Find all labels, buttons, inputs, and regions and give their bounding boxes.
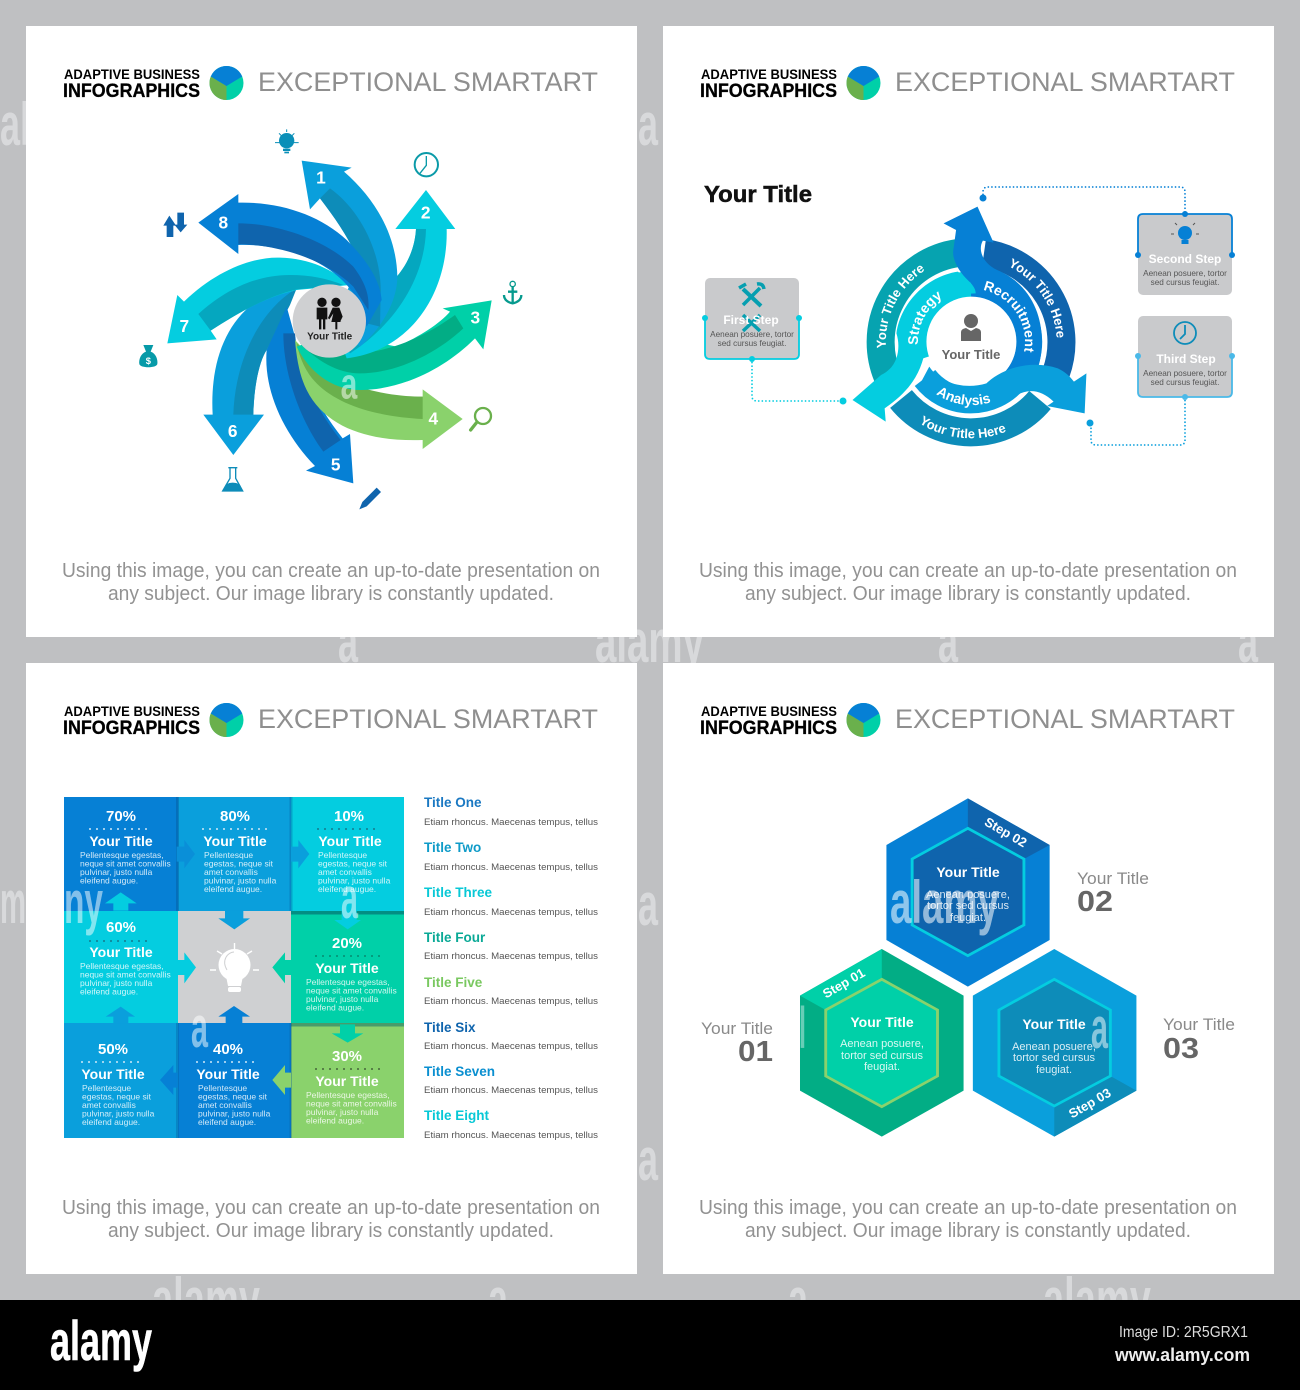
arrow numbers: 4 (429, 409, 439, 429)
arrow: strategy (852, 272, 976, 422)
box: second step: sed cursus feugiat. (1151, 278, 1219, 287)
watermarks on gutters: alamy (1043, 1266, 1151, 1333)
footer text: spiral panel (62, 560, 600, 605)
cell: 80%: pulvinar, justo nulla (204, 876, 277, 886)
footer text: spiral panel: Using this image, you can create an up-to-date presentation on (62, 560, 600, 582)
title list: Etiam rhoncus. Maecenas tempus, tellus (424, 817, 598, 828)
footer text: hexagon panel (699, 1197, 1237, 1242)
curved ring labels: Your Title Here (1011, 258, 1064, 338)
title list: Etiam rhoncus. Maecenas tempus, tellus (424, 1041, 598, 1052)
header: matrix panel: ADAPTIVE BUSINESS (64, 704, 200, 719)
side label: 03: Your Title (1163, 1016, 1235, 1034)
watermarks on gutters: a (638, 91, 658, 158)
cell: 40%: amet convallis (198, 1100, 252, 1110)
watermarks on gutters: a (788, 1266, 808, 1333)
cell: 50% (81, 1041, 155, 1127)
hexagon text: step 01: Aenean posuere, (840, 1038, 924, 1050)
watermark letters (64, 866, 358, 1060)
hexagon text: step 02 (926, 814, 1030, 924)
header: cycle panel: INFOGRAPHICS (700, 81, 837, 102)
cell: 10% (318, 808, 391, 894)
watermarks on gutters: a (638, 1126, 658, 1193)
cell: 60%: eleifend augue. (80, 986, 138, 996)
arrow 3 (297, 300, 492, 390)
side label: 02: 02 (1077, 886, 1113, 918)
hexagon text: step 02: tortor sed cursus (927, 900, 1009, 912)
cell: 20%: eleifend augue. (306, 1002, 364, 1012)
cell: 20%: pulvinar, justo nulla (306, 994, 379, 1004)
footer text: spiral panel: any subject. Our image library is constantly updated. (108, 583, 554, 605)
footer text: cycle panel: any subject. Our image library is constantly updated. (745, 583, 1191, 605)
cell: 60%: neque sit amet convallis (80, 970, 171, 980)
side label: 03: 03 (1163, 1033, 1199, 1065)
icon: clock (1174, 322, 1196, 344)
panel: cycle diagram (663, 26, 1274, 637)
cell: 30%: neque sit amet convallis (306, 1098, 397, 1108)
hexagon shapes (800, 798, 1136, 1137)
box: second step: Aenean posuere, tortor (1143, 269, 1227, 278)
curved ring labels: Strategy (908, 291, 941, 344)
watermarks on gutters: a (938, 608, 958, 675)
watermarks on gutters: al (0, 91, 30, 158)
cell: 60%: pulvinar, justo nulla (80, 978, 153, 988)
spiral arrow chart (139, 129, 521, 509)
cell: 70%: pulvinar, justo nulla (80, 867, 153, 877)
hexagon text: step 03: Your Title (1022, 1016, 1086, 1032)
hexagon text: step 02: feugiat. (950, 912, 986, 924)
cell: 20% (306, 935, 397, 1012)
watermarks over hexagons: a (1091, 996, 1108, 1061)
box: second step (1135, 211, 1235, 295)
hexagon text: step 01: feugiat. (864, 1061, 900, 1073)
footer text: cycle panel (699, 560, 1237, 605)
footer text: matrix panel: any subject. Our image library is constantly updated. (108, 1220, 554, 1242)
cell: 50%: eleifend augue. (82, 1117, 140, 1127)
title list: Etiam rhoncus. Maecenas tempus, tellus (424, 996, 598, 1007)
cell: 10%: amet convallis (318, 867, 372, 877)
panel: matrix (26, 663, 637, 1274)
box: first step: First Step (723, 313, 779, 327)
center white circle (926, 297, 1016, 387)
dotted connectors (752, 187, 1185, 445)
watermark letter: a (341, 360, 358, 408)
cell: 10%: Your Title (318, 833, 382, 849)
watermark letters: a (341, 866, 358, 931)
panel: hexagons (663, 663, 1274, 1274)
curved ring labels (876, 258, 1064, 438)
title list: Etiam rhoncus. Maecenas tempus, tellus (424, 862, 598, 873)
cell: 50%: Pellentesque (82, 1083, 131, 1093)
watermarks on gutters: a (488, 1266, 508, 1333)
center circle with people (293, 284, 366, 358)
header: matrix panel: EXCEPTIONAL SMARTART (258, 704, 598, 734)
side label: 03 (1163, 1016, 1235, 1065)
footer text: matrix panel (62, 1197, 600, 1242)
icon: magnifier (471, 408, 491, 430)
hexagon text: step 01: Step 01 (820, 965, 868, 1001)
header: spiral panel: ADAPTIVE BUSINESS (64, 67, 200, 82)
cell: 40%: 40% (213, 1041, 243, 1058)
cell: 80% (203, 808, 277, 894)
cell: 30%: 30% (332, 1048, 362, 1065)
watermarks on gutters: a (338, 608, 358, 675)
icon: money bag: $ (146, 356, 152, 366)
cell: 40%: Pellentesque (198, 1083, 247, 1093)
watermarks on gutters: alamy (152, 1266, 260, 1333)
hexagon text: step 03 (1012, 1016, 1114, 1121)
box: first step: sed cursus feugiat. (718, 339, 786, 348)
center person and title (942, 314, 1000, 362)
watermarks on gutters: alamy (595, 608, 704, 675)
arrow 4 (295, 340, 463, 449)
hexagon: step 03 (973, 949, 1136, 1137)
watermarks over hexagons (799, 869, 1108, 1061)
cell: 60%: 60% (106, 919, 136, 936)
watermarks on gutters: a (638, 871, 658, 938)
hexagon text: step 01: tortor sed cursus (841, 1050, 923, 1062)
hexagon: step 02 (886, 798, 1050, 987)
cell: 20%: Pellentesque egestas, (306, 977, 390, 987)
cell: 70% (80, 808, 171, 886)
title list: Etiam rhoncus. Maecenas tempus, tellus (424, 1130, 598, 1141)
cell: 30%: Your Title (315, 1073, 379, 1089)
cell: 60%: Your Title (89, 944, 153, 960)
watermark letters: ny (64, 869, 103, 936)
title list: Title One (424, 795, 482, 810)
icon: up and down arrows (163, 213, 187, 237)
header: spiral panel (63, 66, 598, 102)
cell: 50%: 50% (98, 1041, 128, 1058)
cell: 40%: egestas, neque sit (198, 1092, 268, 1102)
cell: 10%: pulvinar, justo nulla (318, 876, 391, 886)
icon: bulb (1171, 223, 1199, 244)
cell: 30% (306, 1048, 397, 1126)
center circle with people: Your Title (307, 331, 353, 342)
header: hexagon panel: ADAPTIVE BUSINESS (701, 704, 837, 719)
flow arrows between cells (105, 840, 363, 1095)
curved ring labels: Your Title Here (876, 266, 924, 348)
cell: 50%: amet convallis (82, 1100, 136, 1110)
watermarks over hexagons: l (799, 996, 806, 1061)
cell: 10%: eleifend augue. (318, 884, 376, 894)
header: hexagon panel: EXCEPTIONAL SMARTART (895, 704, 1235, 734)
title list: Etiam rhoncus. Maecenas tempus, tellus (424, 1085, 598, 1096)
credit bar: www.alamy.com (1114, 1345, 1250, 1365)
cell: 20%: 20% (332, 935, 362, 952)
title list: Title Three (424, 885, 493, 900)
icon: clock (415, 153, 438, 176)
arrow 6 (203, 287, 297, 455)
icon: light bulb (275, 129, 299, 153)
cell: 30%: eleifend augue. (306, 1116, 364, 1126)
cell: 70%: Pellentesque egestas, (80, 850, 164, 860)
cell: 80%: Your Title (203, 833, 267, 849)
cell: 10%: Pellentesque (318, 850, 367, 860)
cell: 50%: Your Title (81, 1066, 145, 1082)
footer text: matrix panel: Using this image, you can create an up-to-date presentation on (62, 1197, 600, 1219)
panel: spiral arrows (26, 26, 637, 637)
icon: anchor (504, 281, 521, 303)
icon: center light bulb (210, 943, 259, 992)
side label: 02 (1077, 870, 1149, 918)
cell: 30%: pulvinar, justo nulla (306, 1107, 379, 1117)
grid cells (64, 797, 404, 1138)
cell: 40%: Your Title (196, 1066, 260, 1082)
box: third step (1135, 316, 1235, 400)
cell: 70%: neque sit amet convallis (80, 858, 171, 868)
arrow 7 (167, 258, 350, 343)
arrow 8 (198, 194, 382, 327)
watermarks over hexagons: alamy (890, 869, 999, 936)
title list: Title Seven (424, 1064, 495, 1079)
cell: 60% (80, 919, 171, 996)
header: hexagon panel (700, 703, 1235, 739)
title list: Title Eight (424, 1108, 490, 1123)
matrix grid (64, 797, 404, 1138)
header: cycle panel (700, 66, 1235, 102)
hexagon text: step 03: Step 03 (1066, 1085, 1114, 1121)
credit bar: Image ID: 2R5GRX1 (1119, 1324, 1248, 1341)
cell: 80%: egestas, neque sit (204, 858, 274, 868)
arrow 2 (333, 190, 455, 358)
header: spiral panel: INFOGRAPHICS (63, 81, 200, 102)
title list: Title Five (424, 975, 483, 990)
title list: Etiam rhoncus. Maecenas tempus, tellus (424, 907, 598, 918)
header: cycle panel: EXCEPTIONAL SMARTART (895, 67, 1235, 97)
arrow numbers: 8 (219, 212, 229, 232)
cell: 30%: Pellentesque egestas, (306, 1090, 390, 1100)
arrow numbers (180, 167, 481, 474)
arrow numbers: 3 (471, 308, 481, 328)
header: hexagon panel: INFOGRAPHICS (700, 718, 837, 739)
cell: 80%: amet convallis (204, 867, 258, 877)
cell: 40% (196, 1041, 271, 1127)
box: third step: sed cursus feugiat. (1151, 378, 1219, 387)
hexagon: step 01 (800, 949, 964, 1137)
cell: 80%: eleifend augue. (204, 884, 262, 894)
hexagon text: step 02: Aenean posuere, (926, 889, 1010, 901)
header: spiral panel: EXCEPTIONAL SMARTART (258, 67, 598, 97)
arrow: analysis (919, 365, 1086, 413)
arrow numbers: 7 (180, 316, 189, 336)
cell: 40%: eleifend augue. (198, 1117, 256, 1127)
side label: 01: 01 (738, 1036, 773, 1068)
arrow 5 (266, 307, 353, 483)
footer text: hexagon panel: any subject. Our image library is constantly updated. (745, 1220, 1191, 1242)
arrow numbers: 5 (331, 454, 341, 474)
hexagon text: step 03: Aenean posuere, (1012, 1041, 1096, 1053)
hexagon text: step 03: feugiat. (1036, 1064, 1072, 1076)
curved ring labels: Recruitment (984, 280, 1034, 352)
hexagon text: step 02: Step 02 (982, 814, 1030, 850)
cell: 10%: egestas, neque sit (318, 858, 388, 868)
title list: Title Two (424, 840, 481, 855)
icon: tools (739, 284, 764, 331)
heading: your title: Your Title (704, 181, 812, 207)
arrow numbers: 6 (228, 421, 238, 441)
box: third step: Aenean posuere, tortor (1143, 369, 1227, 378)
cell: 10%: 10% (334, 808, 364, 825)
arrow numbers: 2 (421, 203, 430, 223)
hexagon text: step 01 (820, 965, 924, 1073)
connector end dots (840, 194, 1094, 426)
cell: 70%: Your Title (89, 833, 153, 849)
arrow: recruitment (944, 207, 1042, 377)
header: matrix panel: INFOGRAPHICS (63, 718, 200, 739)
hexagon text: step 02: Your Title (936, 864, 1000, 880)
side label: 01: Your Title (701, 1020, 773, 1038)
curved ring labels: Analysis (936, 388, 990, 408)
icon: money bag (139, 345, 157, 367)
cycle arrows (852, 207, 1086, 422)
watermark letters: a (191, 995, 208, 1060)
watermarks on gutters: m (0, 869, 26, 936)
box: first step (702, 278, 802, 362)
center person and title: Your Title (942, 347, 1000, 362)
title list: Title Four (424, 930, 486, 945)
side label: 02: Your Title (1077, 870, 1149, 888)
cell: 20%: Your Title (315, 960, 379, 976)
watermarks on gutters: a (1238, 608, 1258, 675)
footer text: hexagon panel: Using this image, you can create an up-to-date presentation on (699, 1197, 1237, 1219)
title list: Title Six (424, 1020, 476, 1035)
credit bar (0, 1300, 1300, 1390)
cell: 50%: egestas, neque sit (82, 1092, 152, 1102)
icon: pencil (359, 488, 381, 509)
curved ring labels: Your Title Here (922, 415, 1006, 438)
title list (424, 795, 598, 1141)
arrow 1 (302, 161, 397, 347)
arrow numbers: 1 (316, 167, 326, 187)
hexagon text: step 01: Your Title (850, 1014, 914, 1030)
title list: Etiam rhoncus. Maecenas tempus, tellus (424, 951, 598, 962)
box: third step: Third Step (1156, 352, 1216, 366)
cell: 80%: Pellentesque (204, 850, 253, 860)
cell: 20%: neque sit amet convallis (306, 986, 397, 996)
box: first step: Aenean posuere, tortor (710, 330, 794, 339)
cell: 70%: eleifend augue. (80, 876, 138, 886)
footer text: cycle panel: Using this image, you can create an up-to-date presentation on (699, 560, 1237, 582)
cell: 80%: 80% (220, 808, 250, 825)
cell: 50%: pulvinar, justo nulla (82, 1108, 155, 1118)
credit bar: alamy (50, 1309, 152, 1372)
cell: 40%: pulvinar, justo nulla (198, 1108, 271, 1118)
outer ring segments (881, 253, 1061, 432)
side label: 01 (701, 1020, 773, 1068)
header: matrix panel (63, 703, 598, 739)
box: second step: Second Step (1149, 252, 1221, 266)
header: cycle panel: ADAPTIVE BUSINESS (701, 67, 837, 82)
icon: flask (223, 468, 243, 491)
inner ring segments (915, 284, 1029, 400)
cell: 60%: Pellentesque egestas, (80, 961, 164, 971)
cell: 70%: 70% (106, 808, 136, 825)
hexagon text: step 03: tortor sed cursus (1013, 1052, 1095, 1064)
